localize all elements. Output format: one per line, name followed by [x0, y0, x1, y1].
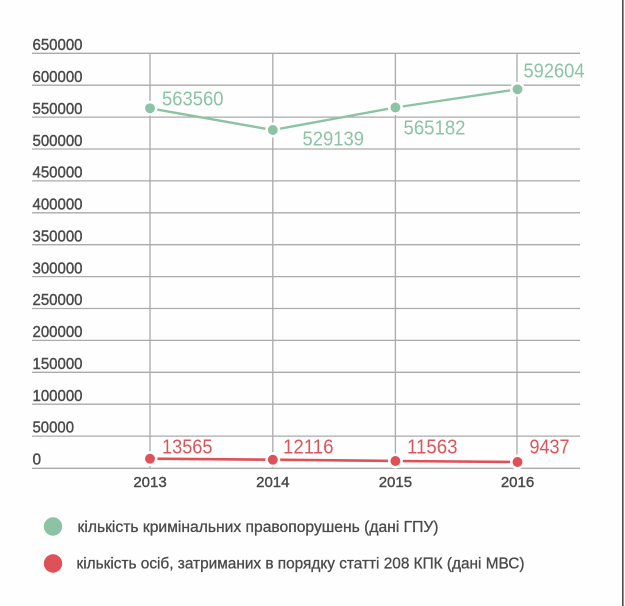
- green series: criminal offences: 565182: [404, 116, 466, 140]
- green series: criminal offences: 592604: [524, 60, 584, 82]
- y axis labels: 250000: [32, 292, 82, 309]
- red series: detained persons: 9437: [530, 436, 570, 458]
- y axis labels: 300000: [32, 260, 82, 278]
- x axis year labels: 2014: [256, 474, 289, 491]
- red series: detained persons: 13565: [162, 436, 212, 458]
- x axis year labels: 2015: [379, 474, 412, 491]
- y axis labels: 600000: [32, 69, 82, 86]
- y axis labels: 550000: [32, 101, 82, 118]
- red series: detained persons: 12116: [283, 436, 334, 458]
- y axis labels: 400000: [32, 196, 82, 214]
- red series: detained persons: [144, 436, 570, 468]
- green series: criminal offences: 563560: [162, 88, 224, 110]
- x axis year labels: 2016: [501, 474, 534, 491]
- red series: detained persons: 11563: [407, 436, 458, 458]
- green series: criminal offences: 529139: [302, 128, 364, 150]
- x axis year labels: [133, 474, 534, 491]
- x axis year labels: 2013: [133, 474, 167, 491]
- y axis labels: 150000: [32, 356, 82, 373]
- y axis labels: 650000: [32, 37, 82, 54]
- y axis labels: 200000: [32, 324, 82, 341]
- y axis labels: 50000: [32, 420, 74, 436]
- y axis labels: 350000: [32, 228, 82, 246]
- y axis labels: [32, 37, 82, 468]
- y axis labels: 450000: [32, 164, 82, 182]
- legend item: red series: кількість осіб, затриманих в порядку статті 208 КПК (дані МВС): [76, 556, 524, 572]
- y axis labels: 0: [32, 452, 41, 468]
- legend: [44, 517, 525, 573]
- y axis labels: 500000: [32, 133, 82, 150]
- green series: criminal offences: [144, 60, 585, 150]
- legend item: green series: кількість кримінальних правопорушень (дані ГПУ): [78, 519, 438, 536]
- y axis labels: 100000: [32, 388, 82, 405]
